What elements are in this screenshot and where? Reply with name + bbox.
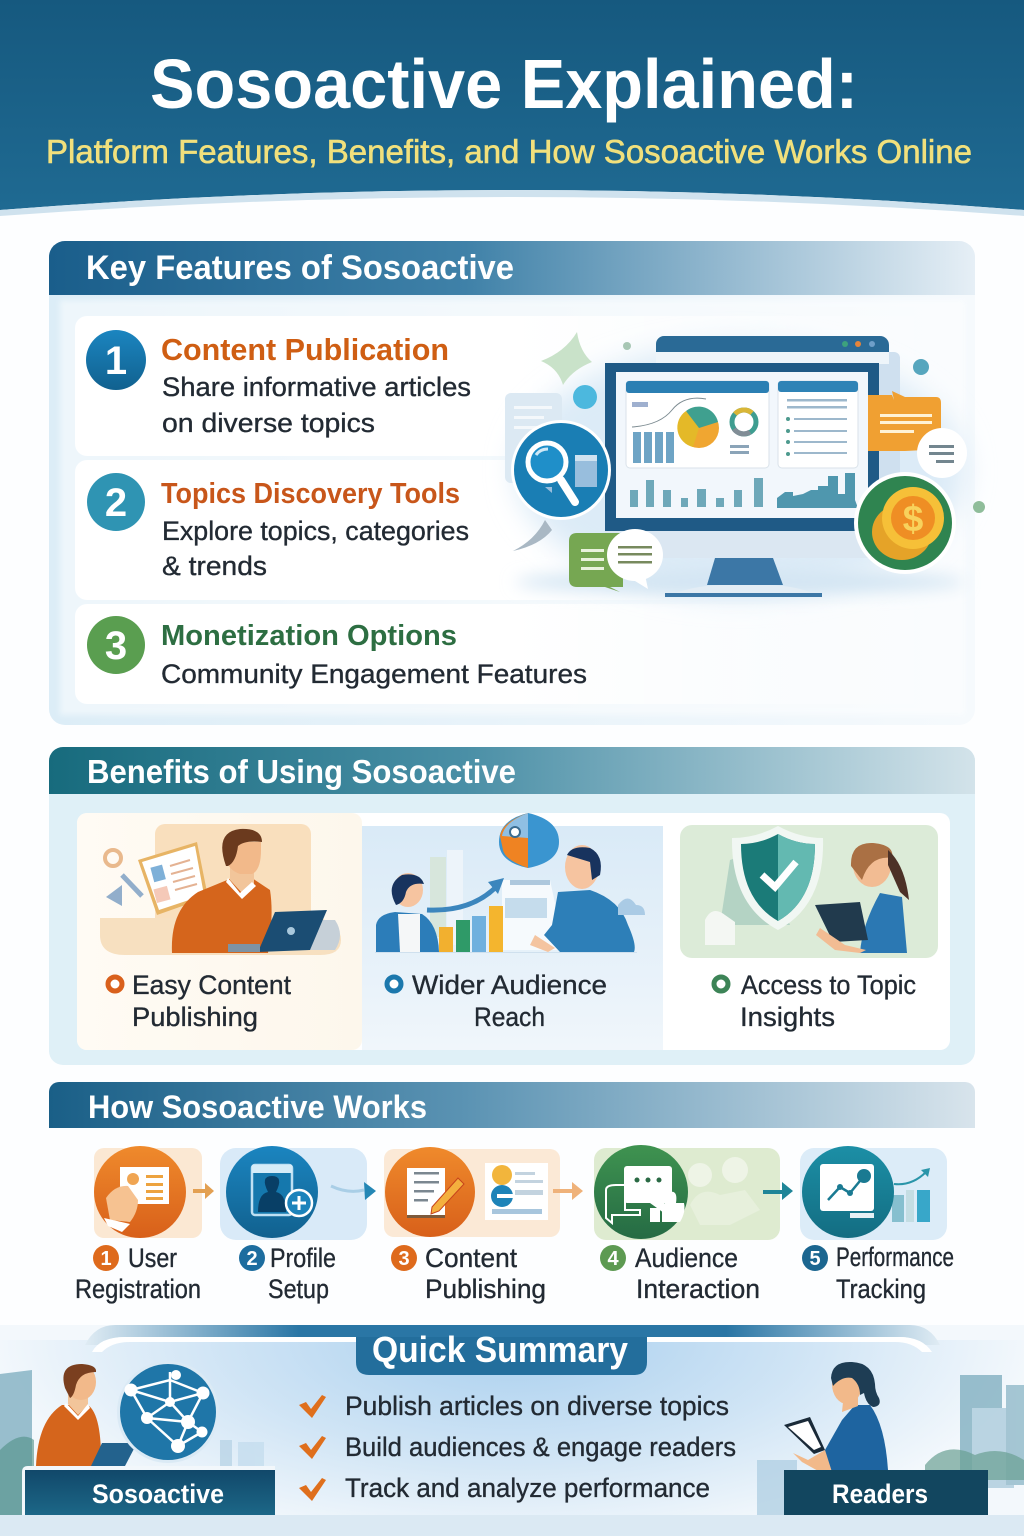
benefit: easy content publishing: Easy Content — [132, 970, 291, 1000]
step 5: performance tracking — [800, 1146, 954, 1304]
feature 2: topics discovery tools: 2 — [105, 481, 127, 525]
section heading: how it works — [49, 1082, 975, 1128]
benefit: access to topic insights: Insights — [740, 1002, 835, 1032]
step 1: user registration: Registration — [75, 1274, 201, 1304]
benefit: wider audience reach: Wider Audience — [412, 970, 607, 1000]
readers label — [784, 1470, 988, 1515]
feature 2: topics discovery tools — [75, 460, 950, 600]
arrow 2 — [331, 1186, 364, 1191]
benefit: access to topic insights — [680, 825, 938, 1032]
icon: orange speech bubble — [868, 391, 967, 478]
feature 1: content publication: 1 — [105, 339, 127, 383]
step 5: performance tracking: Performance — [836, 1242, 954, 1272]
feature 1: content publication — [75, 316, 950, 456]
step 5: performance tracking: 5 — [809, 1248, 821, 1270]
quick summary tab: Quick Summary — [372, 1329, 628, 1370]
step 3: content publishing — [384, 1147, 583, 1304]
icon: gold coins — [854, 472, 956, 574]
step 2: profile setup: Setup — [268, 1274, 329, 1304]
icon: green chat bubbles — [569, 529, 663, 592]
icon: green diamond — [541, 332, 592, 385]
feature 2: topics discovery tools: Explore topics, categories — [162, 516, 469, 546]
readers figure — [784, 1362, 988, 1515]
checklist — [299, 1391, 736, 1503]
step 2: profile setup — [220, 1146, 376, 1304]
step 4: audience interaction: Audience — [635, 1243, 738, 1273]
chart card — [626, 381, 769, 468]
section heading: how it works: How Sosoactive Works — [88, 1089, 427, 1125]
feature 3: monetization options — [75, 604, 950, 704]
section heading: key features — [49, 241, 975, 295]
subtitle: Platform Features, Benefits, and How Sosoactive Works Online — [46, 133, 972, 170]
readers label: Readers — [832, 1479, 928, 1509]
step 4: audience interaction: Interaction — [636, 1274, 760, 1304]
step 4: audience interaction — [594, 1145, 793, 1304]
section heading: benefits — [49, 747, 975, 794]
feature 1: content publication: Content Publication — [161, 332, 449, 367]
feature 1: content publication: Share informative articles — [162, 372, 471, 402]
benefit: easy content publishing: Publishing — [132, 1002, 258, 1032]
panel: key features — [49, 241, 985, 725]
benefit: access to topic insights: Access to Topic — [741, 970, 916, 1000]
checklist: Publish articles on diverse topics — [345, 1391, 729, 1421]
step 3: content publishing: Content — [425, 1243, 517, 1273]
feature 3: monetization options: 3 — [105, 624, 127, 668]
panel: benefits — [49, 747, 975, 1065]
cityscape right — [757, 1375, 1024, 1515]
step 5: performance tracking: Tracking — [836, 1274, 926, 1304]
arrow 3 — [553, 1182, 583, 1200]
step 3: content publishing: Publishing — [425, 1274, 546, 1304]
section heading: key features: Key Features of Sosoactive — [86, 249, 514, 287]
decorative dots — [573, 342, 985, 513]
checklist: Track and analyze performance — [345, 1473, 710, 1503]
list card — [778, 381, 858, 468]
feature 3: monetization options: Monetization Options — [161, 620, 457, 652]
lower bar charts — [630, 473, 858, 508]
feature 1: content publication: on diverse topics — [162, 408, 375, 438]
icon: gold coins: $ — [903, 498, 924, 539]
benefit: wider audience reach — [362, 813, 663, 1050]
header banner — [0, 0, 1024, 216]
sosoactive figure and globe — [22, 1361, 275, 1515]
title: Sosoactive Explained: — [150, 45, 858, 123]
step 3: content publishing: 3 — [398, 1248, 410, 1270]
arrow 4 — [763, 1182, 793, 1200]
section heading: benefits: Benefits of Using Sosoactive — [87, 753, 516, 790]
cityscape left — [0, 1370, 264, 1515]
monitor — [605, 336, 900, 597]
step 4: audience interaction: 4 — [607, 1248, 619, 1270]
icon: magnifier and folder — [511, 420, 611, 520]
sosoactive label — [22, 1466, 275, 1515]
feature 2: topics discovery tools: & trends — [162, 551, 267, 581]
step 2: profile setup: Profile — [270, 1243, 336, 1273]
step 1: user registration — [75, 1146, 214, 1304]
feature 3: monetization options: Community Engagement Features — [161, 659, 587, 689]
benefit: wider audience reach: Reach — [474, 1002, 545, 1032]
step 1: user registration: 1 — [100, 1248, 112, 1270]
icon: network globe — [117, 1361, 219, 1463]
arrow 1 — [193, 1183, 214, 1199]
benefit: easy content publishing — [77, 813, 362, 1050]
checklist: Build audiences & engage readers — [345, 1432, 736, 1462]
step 2: profile setup: 2 — [246, 1248, 258, 1270]
panel: quick summary — [0, 1325, 1024, 1536]
sosoactive label: Sosoactive — [92, 1479, 224, 1509]
feature 2: topics discovery tools: Topics Discovery Tools — [161, 478, 460, 510]
step 1: user registration: User — [128, 1243, 177, 1273]
illustration: dashboard monitor — [505, 332, 985, 597]
